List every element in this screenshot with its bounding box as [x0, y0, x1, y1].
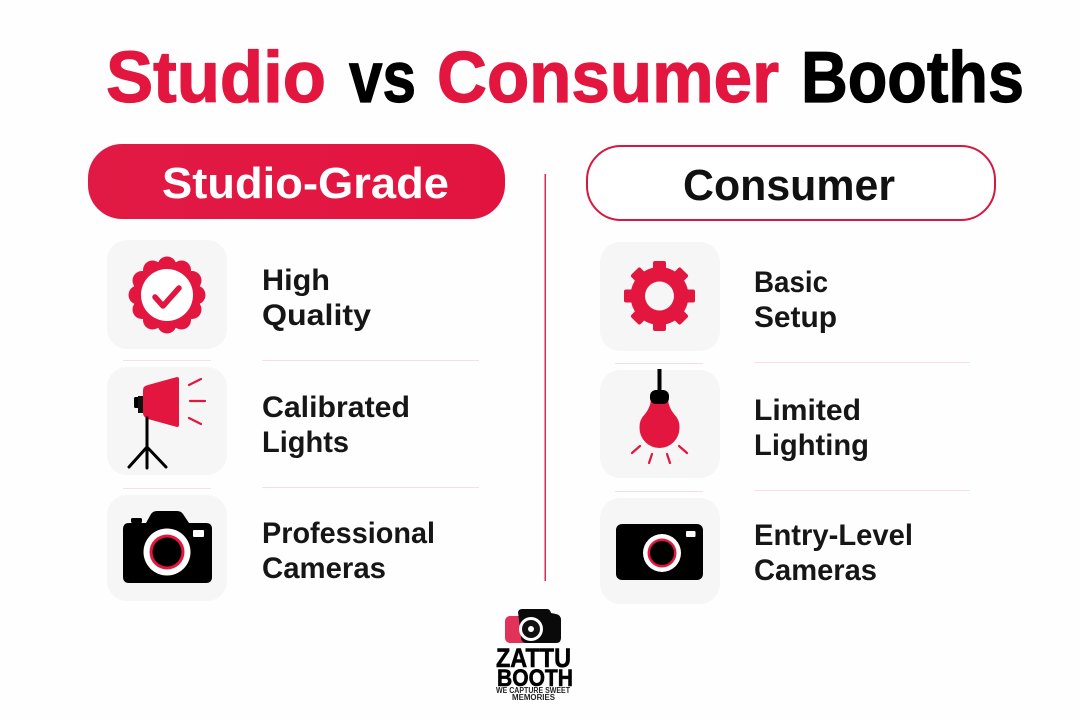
panel: consumer list	[600, 242, 913, 604]
panel: consumer header: Consumer	[683, 161, 895, 210]
text: basic setup: Setup	[754, 301, 837, 334]
text: basic setup	[754, 266, 837, 334]
logo: zattu booth: ZATTU	[496, 643, 571, 673]
title: Studio	[106, 38, 326, 118]
panel: studio-grade list	[107, 240, 435, 601]
text: entry-level cameras: Cameras	[754, 554, 877, 587]
text: entry-level cameras: Entry-Level	[754, 519, 913, 552]
logo: zattu booth: BOOTH	[497, 665, 573, 692]
center divider	[544, 174, 546, 581]
title: Consumer	[437, 38, 779, 118]
icon: gear	[600, 242, 720, 351]
title: Booths	[801, 38, 1024, 118]
text: entry-level cameras	[754, 519, 913, 587]
icon: studio light	[107, 367, 227, 475]
text: professional cameras	[262, 517, 435, 585]
text: high quality: Quality	[262, 299, 371, 332]
text: calibrated lights: Lights	[262, 426, 349, 459]
icon: quality badge	[107, 240, 227, 349]
text: professional cameras: Cameras	[262, 552, 386, 585]
icon: light bulb	[600, 369, 720, 478]
title: vs	[349, 38, 416, 118]
text: high quality: High	[262, 264, 330, 297]
text: limited lighting	[754, 394, 869, 462]
text: calibrated lights	[262, 391, 410, 459]
logo: zattu booth: WE CAPTURE SWEET	[496, 686, 570, 695]
text: high quality	[262, 264, 371, 332]
logo: zattu booth	[496, 609, 573, 702]
text: limited lighting: Lighting	[754, 429, 869, 462]
icon: professional camera	[107, 495, 227, 601]
text: basic setup: Basic	[754, 266, 828, 299]
text: professional cameras: Professional	[262, 517, 435, 550]
title	[106, 38, 1024, 118]
text: limited lighting: Limited	[754, 394, 861, 427]
icon: entry-level camera	[600, 498, 720, 604]
logo: zattu booth: MEMORIES	[512, 693, 556, 702]
panel: consumer header	[587, 146, 995, 220]
panel: studio-grade header	[88, 144, 505, 219]
panel: studio-grade header: Studio-Grade	[162, 159, 449, 208]
text: calibrated lights: Calibrated	[262, 391, 410, 424]
